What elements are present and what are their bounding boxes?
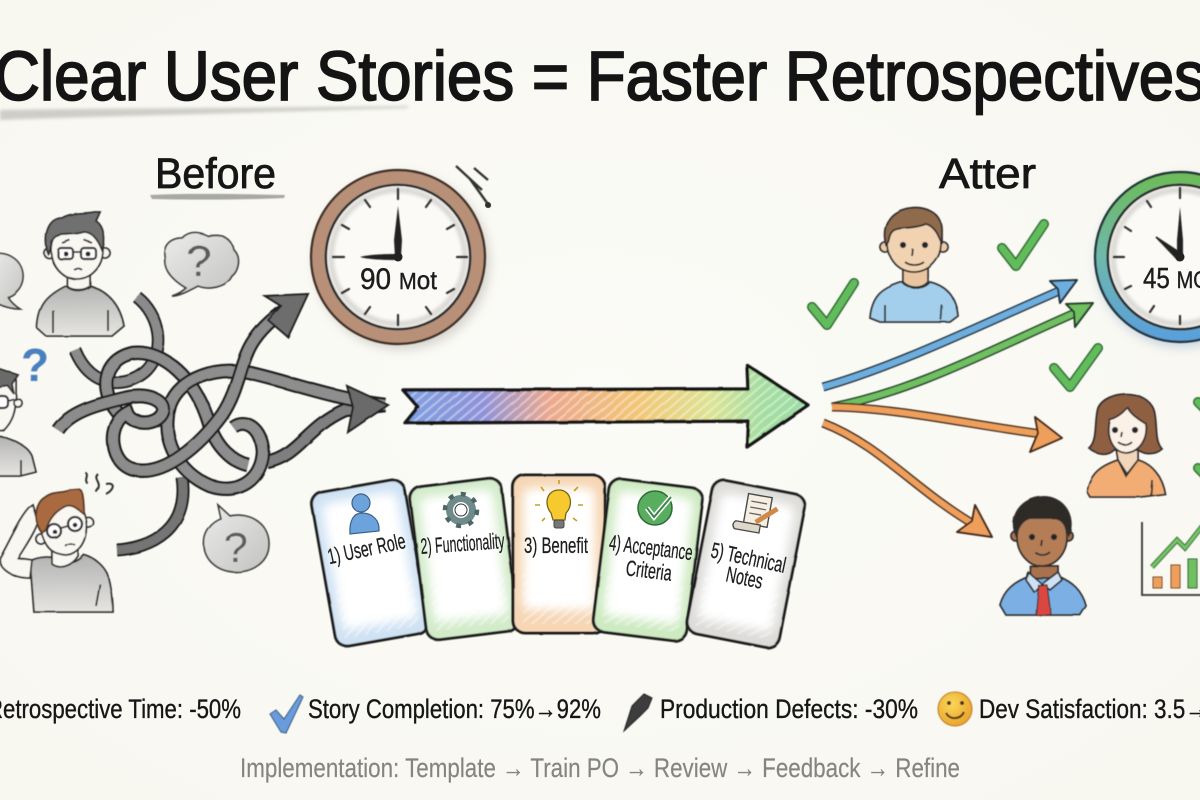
arrow: blue to clock — [823, 280, 1077, 387]
clock: 90 minutes — [311, 166, 491, 350]
chart: rising performance — [1142, 522, 1200, 595]
implementation steps: Implementation: Template → Train PO → Review → Feedback → Refine — [240, 753, 960, 783]
card 5: technical notes — [685, 478, 807, 650]
person: happy woman — [1087, 394, 1165, 497]
icon: pen — [624, 694, 652, 731]
card 2: functionality — [409, 477, 519, 641]
card 4: acceptance criteria — [592, 478, 704, 642]
person: smiling man in tie — [1000, 497, 1086, 615]
bubble: round question: ? — [224, 524, 248, 571]
card 3: benefit — [513, 475, 605, 633]
person: confused left edge — [0, 367, 36, 476]
icon: blue check — [270, 695, 303, 733]
card 5: technical notes: Notes — [724, 562, 765, 594]
clock: 45 minutes — [1095, 172, 1200, 348]
metric: production defects: Production Defects: -30% — [660, 694, 918, 724]
card 1: user role: 1) User Role — [325, 528, 408, 569]
bubble: cloud question top: ? — [187, 237, 211, 286]
person: scratching head — [0, 473, 113, 612]
cards: five story elements — [310, 475, 807, 650]
clock: 90 minutes: 90 Mot — [360, 263, 438, 296]
card 4: acceptance criteria: Criteria — [625, 555, 674, 586]
tangled arrows — [58, 294, 388, 550]
heading: after: Atter — [939, 150, 1036, 198]
card 3: benefit: 3) Benefit — [524, 533, 588, 558]
metric: story completion: Story Completion: 75%→92% — [308, 694, 601, 724]
arrow: orange to developer — [832, 407, 1062, 452]
colored result arrows — [823, 280, 1093, 537]
rainbow progress arrow — [403, 365, 808, 447]
heading: before: Before — [155, 150, 276, 198]
arrow: orange to team member — [823, 423, 992, 537]
person: happy blue shirt — [870, 208, 958, 322]
card 4: acceptance criteria: 4) Acceptance — [608, 530, 694, 565]
bubble: round question — [204, 505, 269, 572]
bubble: left edge speech — [0, 253, 23, 309]
card 1: user role — [310, 478, 430, 648]
arrow: green to clock — [832, 303, 1093, 407]
icon: smiley — [938, 692, 972, 726]
icon: green check marks — [812, 224, 1200, 476]
icon: blue question mark: ? — [21, 339, 49, 391]
person: confused top-left — [37, 212, 124, 336]
bubble: cloud question top — [164, 232, 238, 296]
card 2: functionality: 2) Functionality — [420, 528, 505, 559]
metrics row — [0, 692, 1200, 733]
card 5: technical notes: 5) Technical — [709, 538, 788, 578]
